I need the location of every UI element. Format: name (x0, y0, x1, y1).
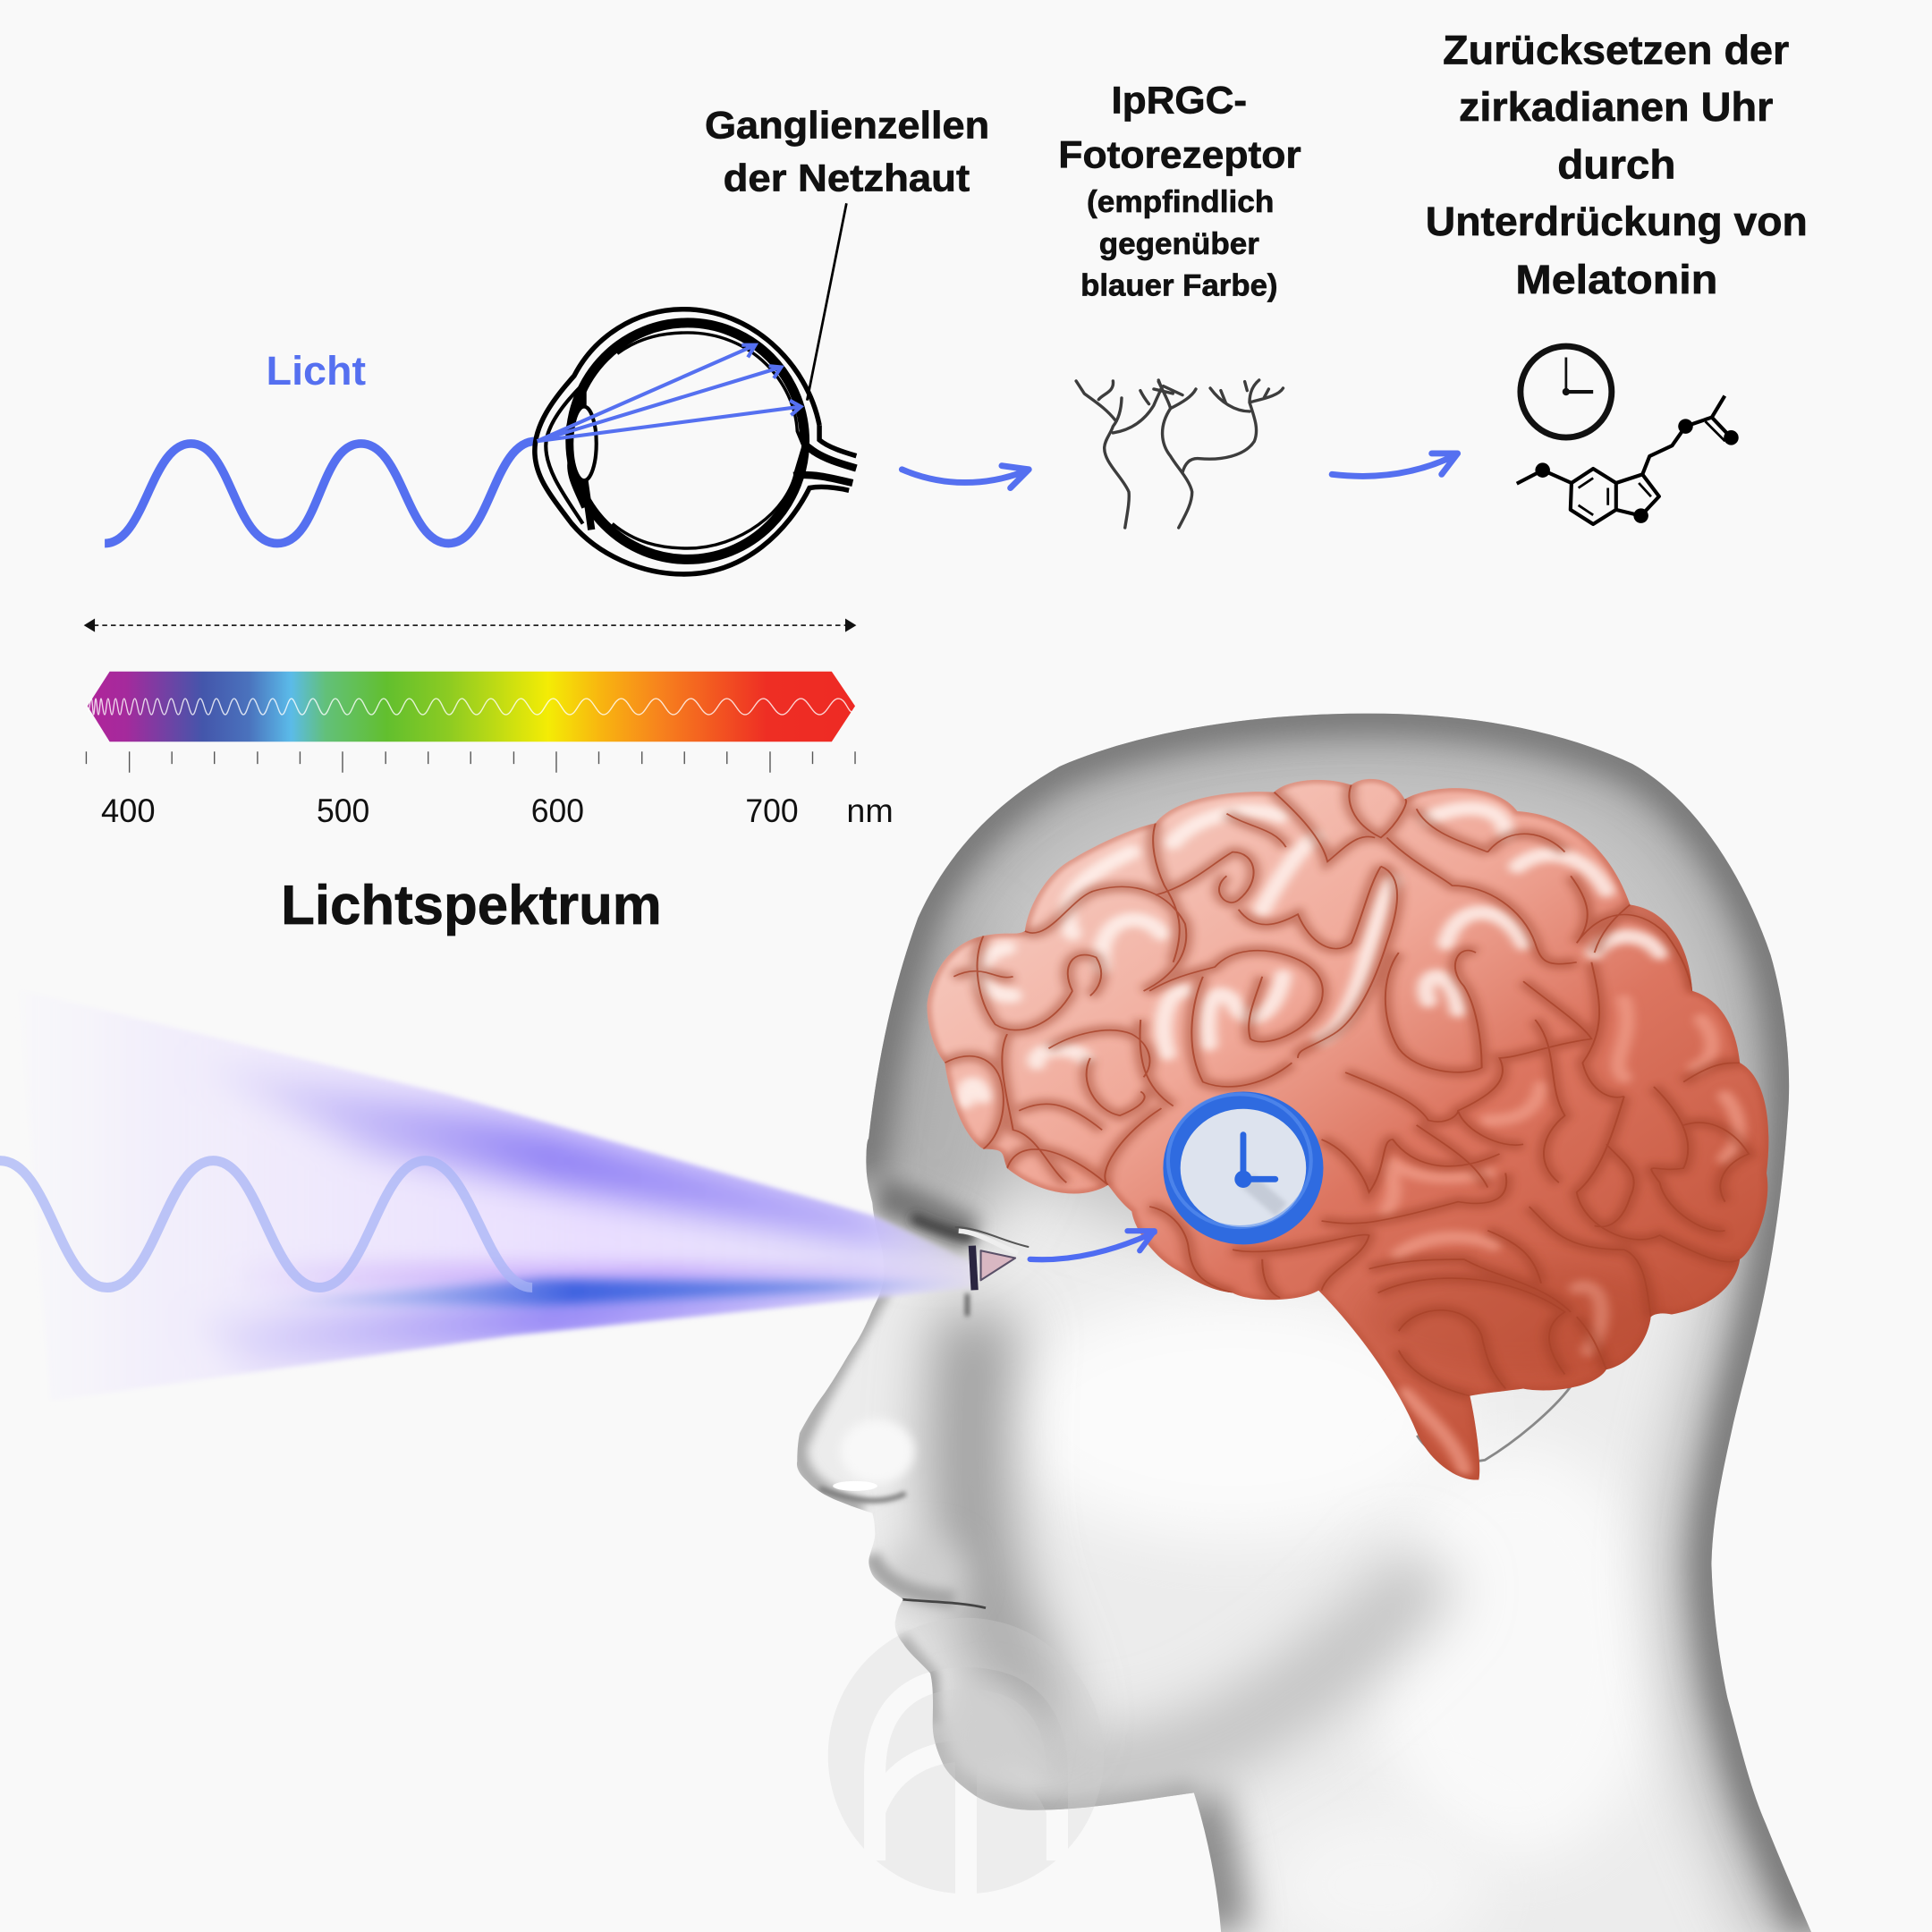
heading: Zurücksetzen der zirkadianen Uhr (1426, 28, 1808, 302)
icon: melatonin molecule (1517, 396, 1739, 524)
dashed range arrow (84, 619, 856, 632)
brain dark lower region (1378, 1279, 1651, 1355)
arrow: eye to brain clock (1030, 1231, 1155, 1259)
arrow: photoreceptor to clock (1332, 453, 1458, 476)
icon: ipRGC neurons (1076, 380, 1283, 528)
heading: IpRGC-Fotorezeptor: IpRGC- (1112, 80, 1247, 123)
brain (927, 779, 1768, 1480)
heading: IpRGC-Fotorezeptor: blauer Farbe) (1080, 269, 1278, 303)
spectrum wave (89, 699, 852, 715)
spectrum axis labels: 500 (317, 792, 369, 829)
heading: Zurücksetzen der zirkadianen Uhr: Melatonin (1515, 257, 1717, 302)
spectrum axis labels (101, 792, 894, 829)
heading: Lichtspektrum: Lichtspektrum (281, 875, 662, 936)
gyrus highlights (965, 809, 1660, 1101)
arrow: eye to photoreceptor (902, 466, 1029, 488)
spectrum bar (88, 672, 855, 741)
watermark logo (828, 1618, 1104, 1894)
heading: Ganglienzellen der Netzhaut (705, 104, 989, 200)
big clock icon (1168, 1094, 1315, 1236)
spectrum ticks (86, 751, 855, 773)
heading: Zurücksetzen der zirkadianen Uhr: Zurücksetzen der (1443, 28, 1789, 73)
spectrum axis labels: 600 (531, 792, 584, 829)
label: Licht: Licht (267, 348, 366, 394)
heading: Ganglienzellen der Netzhaut: Ganglienzellen (705, 104, 989, 147)
heading: Zurücksetzen der zirkadianen Uhr: durch (1557, 142, 1675, 188)
label line: Ganglienzellen pointer (807, 203, 846, 401)
arrows: light rays inside eye (538, 345, 801, 441)
spectrum axis labels: 700 (745, 792, 799, 829)
spectrum axis labels: nm (846, 792, 894, 829)
brain lobe rim shadow (927, 779, 1768, 1480)
second light wave (0, 1161, 532, 1288)
icon: eye of the head (955, 1227, 1029, 1316)
icon: eye cross-section (535, 309, 856, 574)
spectrum axis labels: 400 (101, 792, 156, 829)
heading: Zurücksetzen der zirkadianen Uhr: zirkadianen Uhr (1459, 84, 1773, 130)
head profile (797, 696, 1824, 1932)
heading: Ganglienzellen der Netzhaut: der Netzhaut (724, 157, 970, 200)
light beam (126, 1021, 970, 1385)
icon: small clock (1521, 346, 1612, 437)
heading: IpRGC-Fotorezeptor: (empfindlich (1087, 185, 1274, 219)
sulci lines (945, 785, 1749, 1396)
sulci shadows (945, 785, 1749, 1396)
lower-lobe highlights (1377, 993, 1750, 1478)
heading: IpRGC-Fotorezeptor: Fotorezeptor (1058, 133, 1301, 176)
light wave (105, 441, 536, 544)
heading: Zurücksetzen der zirkadianen Uhr: Unterdrückung von (1426, 199, 1808, 244)
heading: IpRGC-Fotorezeptor (1058, 80, 1301, 303)
heading: IpRGC-Fotorezeptor: gegenüber (1099, 227, 1259, 261)
